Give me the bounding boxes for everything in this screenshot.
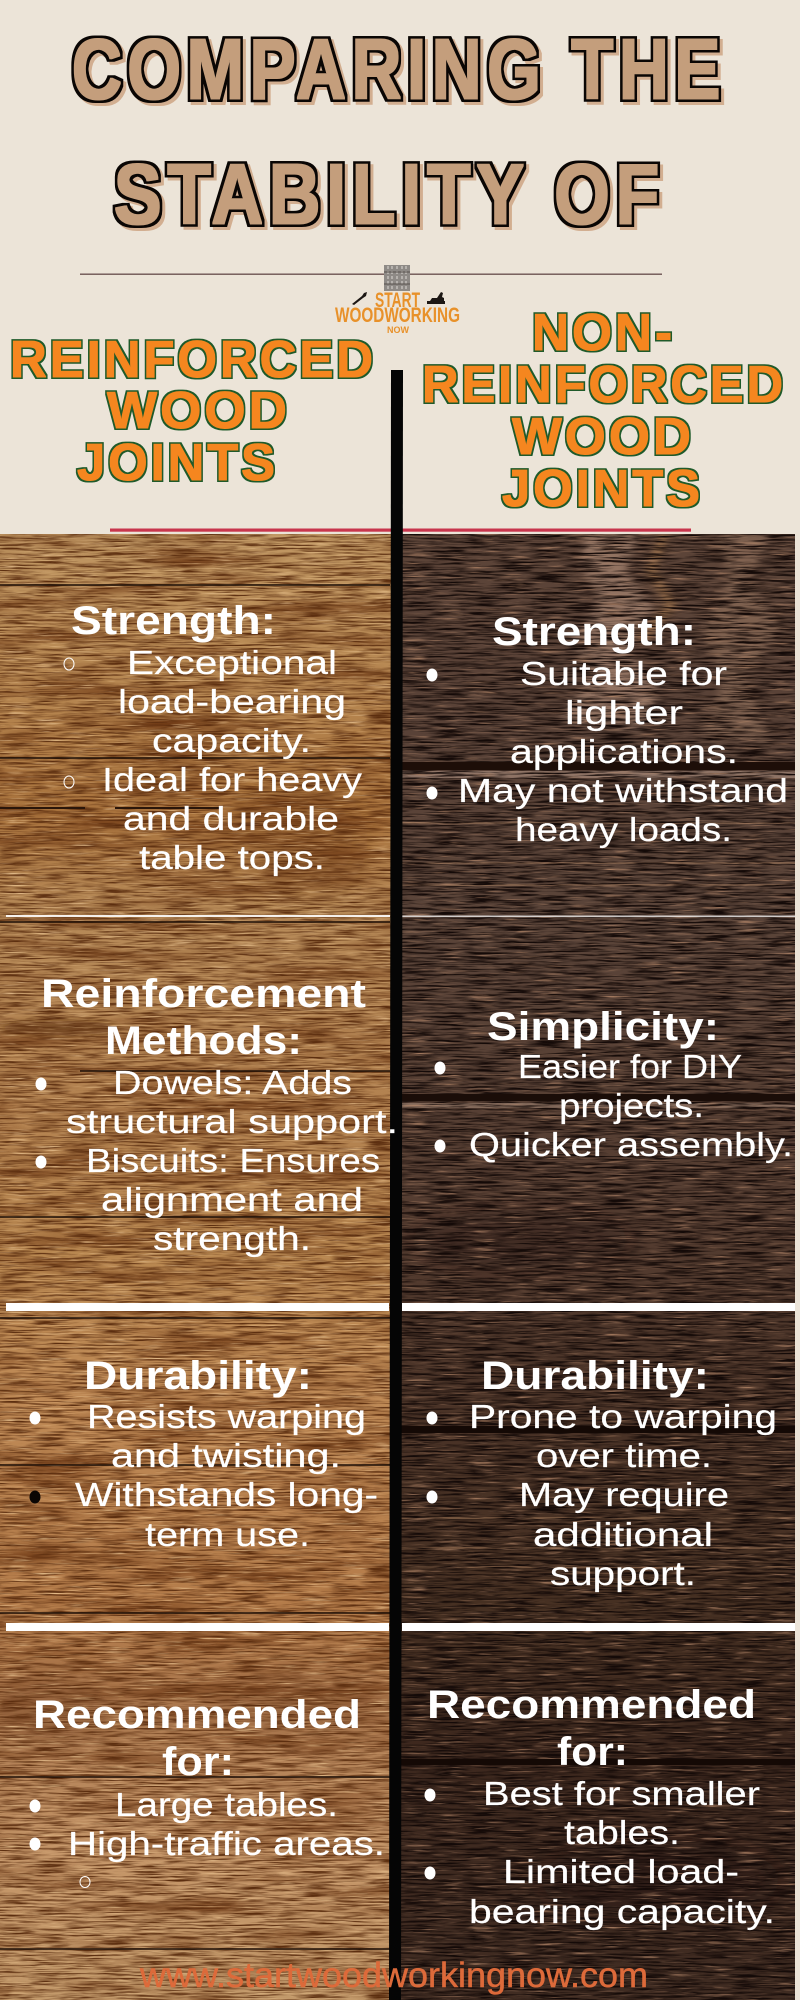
logo: start woodworking now (335, 265, 460, 335)
left: strength (64, 599, 363, 876)
left: durability: and twisting. (111, 1437, 341, 1474)
left: strength: Ideal for heavy (102, 761, 363, 798)
right: strength: applications. (510, 733, 738, 770)
left: reinforcement methods: Methods: (105, 1019, 302, 1063)
icon: saw (352, 292, 367, 305)
left: strength: Exceptional (127, 644, 337, 681)
left: reinforcement methods: Biscuits: Ensures (86, 1142, 380, 1179)
left: recommended for: High-traffic areas. (68, 1825, 385, 1862)
logo: start woodworking now: START (375, 289, 420, 312)
left: durability: Durability: (84, 1354, 312, 1398)
left: reinforcement methods (36, 972, 398, 1257)
logo: start woodworking now: NOW (387, 325, 410, 335)
heading: reinforced wood joints: JOINTS (77, 434, 278, 492)
right: strength: May not withstand (458, 772, 788, 809)
right: recommended for (424, 1683, 775, 1930)
left: strength: Strength: (71, 599, 276, 643)
panel: dark wood background (399, 534, 795, 2000)
right: simplicity: Simplicity: (487, 1005, 719, 1049)
right: recommended for: Limited load- (503, 1853, 739, 1890)
right: durability: May require (519, 1476, 729, 1513)
left: strength: and durable (123, 800, 339, 837)
left: recommended for: for: (162, 1740, 234, 1784)
heading: non-reinforced wood joints: REINFORCED (422, 356, 786, 414)
heading: reinforced wood joints (10, 331, 376, 492)
right: strength: Strength: (492, 610, 696, 654)
right: simplicity: Easier for DIY (518, 1048, 742, 1085)
centre black divider bar (389, 370, 403, 2000)
dividers (6, 915, 795, 1631)
right: simplicity: projects. (559, 1087, 704, 1124)
left: reinforcement methods: Dowels: Adds (113, 1064, 352, 1101)
right: simplicity (434, 1005, 793, 1163)
left: durability: Resists warping (87, 1398, 366, 1435)
left: strength: table tops. (139, 839, 325, 876)
heading: reinforced wood joints: REINFORCED (10, 331, 376, 389)
left: reinforcement methods: alignment and (101, 1181, 363, 1218)
heading: non-reinforced wood joints (422, 304, 786, 518)
right: recommended for: Best for smaller (483, 1775, 760, 1812)
icon: wood grid (384, 265, 410, 291)
icon: plane (427, 292, 445, 304)
right: recommended for: Recommended (427, 1683, 756, 1727)
right: durability: Durability: (481, 1354, 709, 1398)
left: recommended for: Recommended (33, 1693, 361, 1737)
right: recommended for: for: (557, 1730, 628, 1774)
left: recommended for (30, 1693, 385, 1888)
right: recommended for: bearing capacity. (469, 1893, 775, 1930)
title: STABILITY OF (114, 148, 665, 242)
right: strength: lighter (565, 694, 683, 731)
divider line under title (80, 274, 662, 275)
right: simplicity: Quicker assembly. (469, 1126, 793, 1163)
right: strength: heavy loads. (515, 811, 732, 848)
left: recommended for: Large tables. (115, 1786, 338, 1823)
heading: non-reinforced wood joints: WOOD (512, 408, 694, 466)
website footer: www.startwoodworkingnow.com (139, 1956, 648, 1995)
left: durability: Withstands long- (75, 1476, 378, 1513)
right: recommended for: tables. (564, 1814, 680, 1851)
heading: non-reinforced wood joints: NON- (532, 304, 675, 362)
left: reinforcement methods: strength. (153, 1220, 311, 1257)
heading: reinforced wood joints: WOOD (107, 382, 290, 440)
right: durability: over time. (536, 1437, 712, 1474)
left: durability (30, 1354, 378, 1553)
right: strength (426, 610, 788, 848)
logo: start woodworking now: WOODWORKING (335, 304, 460, 327)
title (72, 22, 726, 242)
left: strength: capacity. (152, 722, 311, 759)
left: strength: load-bearing (118, 683, 346, 720)
left: reinforcement methods: Reinforcement (41, 972, 366, 1016)
right: durability: additional (533, 1516, 713, 1553)
right: durability (426, 1354, 777, 1592)
heading: non-reinforced wood joints: JOINTS (502, 460, 703, 518)
left: durability: term use. (145, 1516, 310, 1553)
right: durability: Prone to warping (469, 1398, 777, 1435)
right: strength: Suitable for (520, 655, 727, 692)
left: reinforcement methods: structural support. (66, 1103, 398, 1140)
right: durability: support. (550, 1555, 696, 1592)
panel: light wood background (0, 534, 392, 2000)
red rule above wood panels (110, 528, 691, 532)
